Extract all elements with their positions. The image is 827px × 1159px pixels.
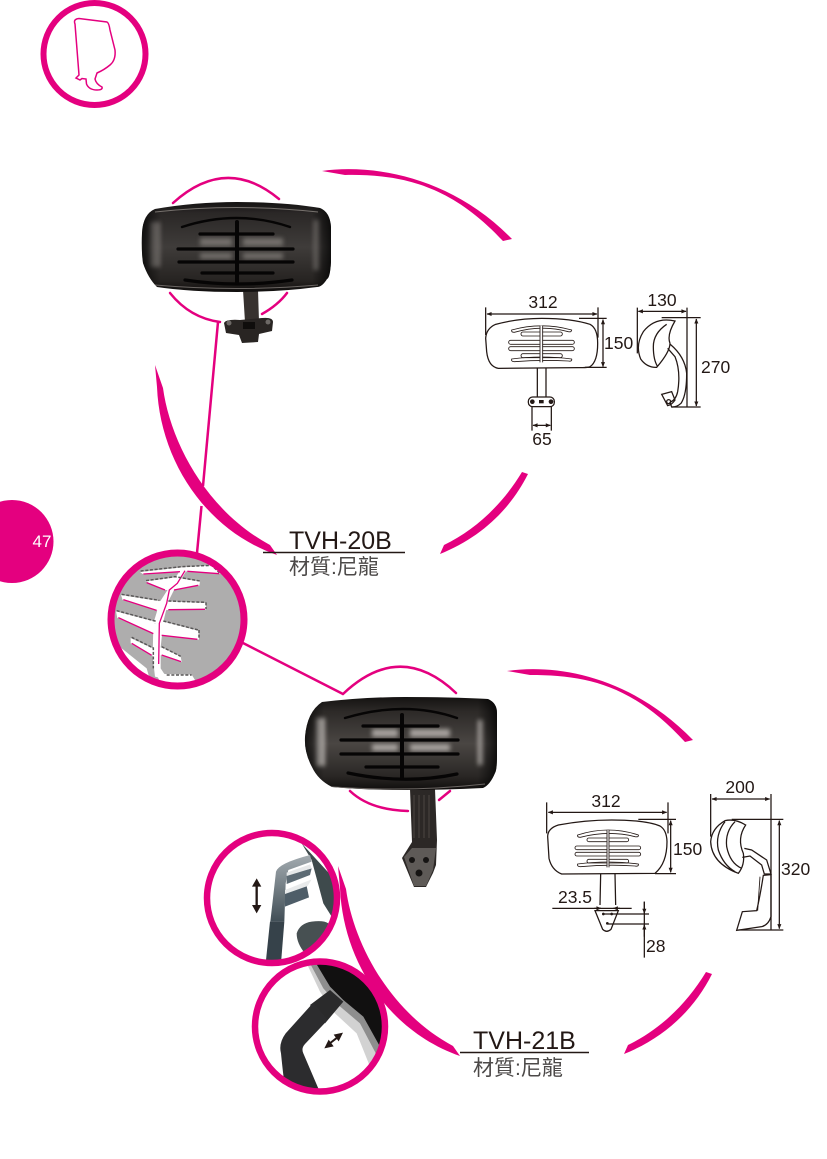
slot fins [113, 565, 221, 688]
headrest photo: TVH-21B [305, 667, 497, 887]
line drawing: TVH-20B front with dimensions: 65 [532, 429, 552, 449]
ring arc: TVH-21B lower right [624, 972, 712, 1054]
detail circle: height adjustment [207, 833, 338, 963]
shell [305, 697, 497, 790]
page number tab: 47 [32, 532, 51, 551]
stem and mount [224, 290, 273, 343]
detail circle: headrest slots [111, 553, 244, 688]
line drawing: TVH-20B front with dimensions: 312 [528, 292, 558, 312]
ring arc: TVH-20B top [322, 169, 512, 241]
highlights [316, 718, 483, 766]
icon: diagonal double arrow [324, 1033, 343, 1048]
material label: TVH-20B: 材質:尼龍 [289, 556, 379, 579]
line drawing: TVH-20B side with dimensions: 130 [647, 290, 677, 310]
line drawing: TVH-21B front with dimensions: 150 [673, 839, 702, 859]
line drawing: TVH-21B side with dimensions: 320 [781, 859, 810, 879]
ring arc: TVH-21B lower left [338, 866, 460, 1056]
ring arc: TVH-21B top [507, 669, 693, 742]
seat frame [266, 843, 338, 963]
title: TVH-21B: TVH-21B [473, 1027, 576, 1055]
shell [142, 202, 331, 292]
icon: vertical double arrow [252, 878, 261, 913]
line drawing: TVH-21B front with dimensions: 312 [591, 791, 621, 811]
headrest photo: TVH-20B [142, 178, 331, 343]
stem and mount [402, 789, 437, 887]
detail circle: depth adjustment [255, 960, 395, 1092]
highlights [150, 220, 319, 270]
page number tab [0, 500, 54, 583]
line drawing: TVH-20B side with dimensions [637, 290, 730, 407]
line drawing: TVH-21B front with dimensions: 28 [646, 936, 665, 956]
line drawing: TVH-21B side with dimensions [711, 777, 810, 930]
icon: headrest outline in circle [44, 3, 146, 105]
material label: TVH-21B: 材質:尼龍 [473, 1057, 563, 1080]
connector line: detail to TVH-21B [243, 643, 343, 694]
title: TVH-20B: TVH-20B [289, 527, 392, 555]
connector line: detail to TVH-20B [197, 322, 218, 553]
line drawing: TVH-20B side with dimensions: 270 [701, 357, 730, 377]
line drawing: TVH-21B front with dimensions: 23.5 [558, 887, 592, 907]
line drawing: TVH-20B front with dimensions [486, 292, 633, 449]
slots [178, 218, 293, 284]
slots [341, 709, 458, 779]
line drawing: TVH-21B front with dimensions [547, 791, 702, 958]
ring arc: TVH-20B lower right [440, 472, 528, 554]
line drawing: TVH-21B side with dimensions: 200 [725, 777, 755, 797]
shell edge and arm [280, 964, 382, 1088]
small arcs [343, 667, 456, 811]
line drawing: TVH-20B front with dimensions: 150 [604, 333, 633, 353]
ring arc: TVH-20B lower left [155, 365, 277, 555]
small arcs [170, 178, 287, 322]
